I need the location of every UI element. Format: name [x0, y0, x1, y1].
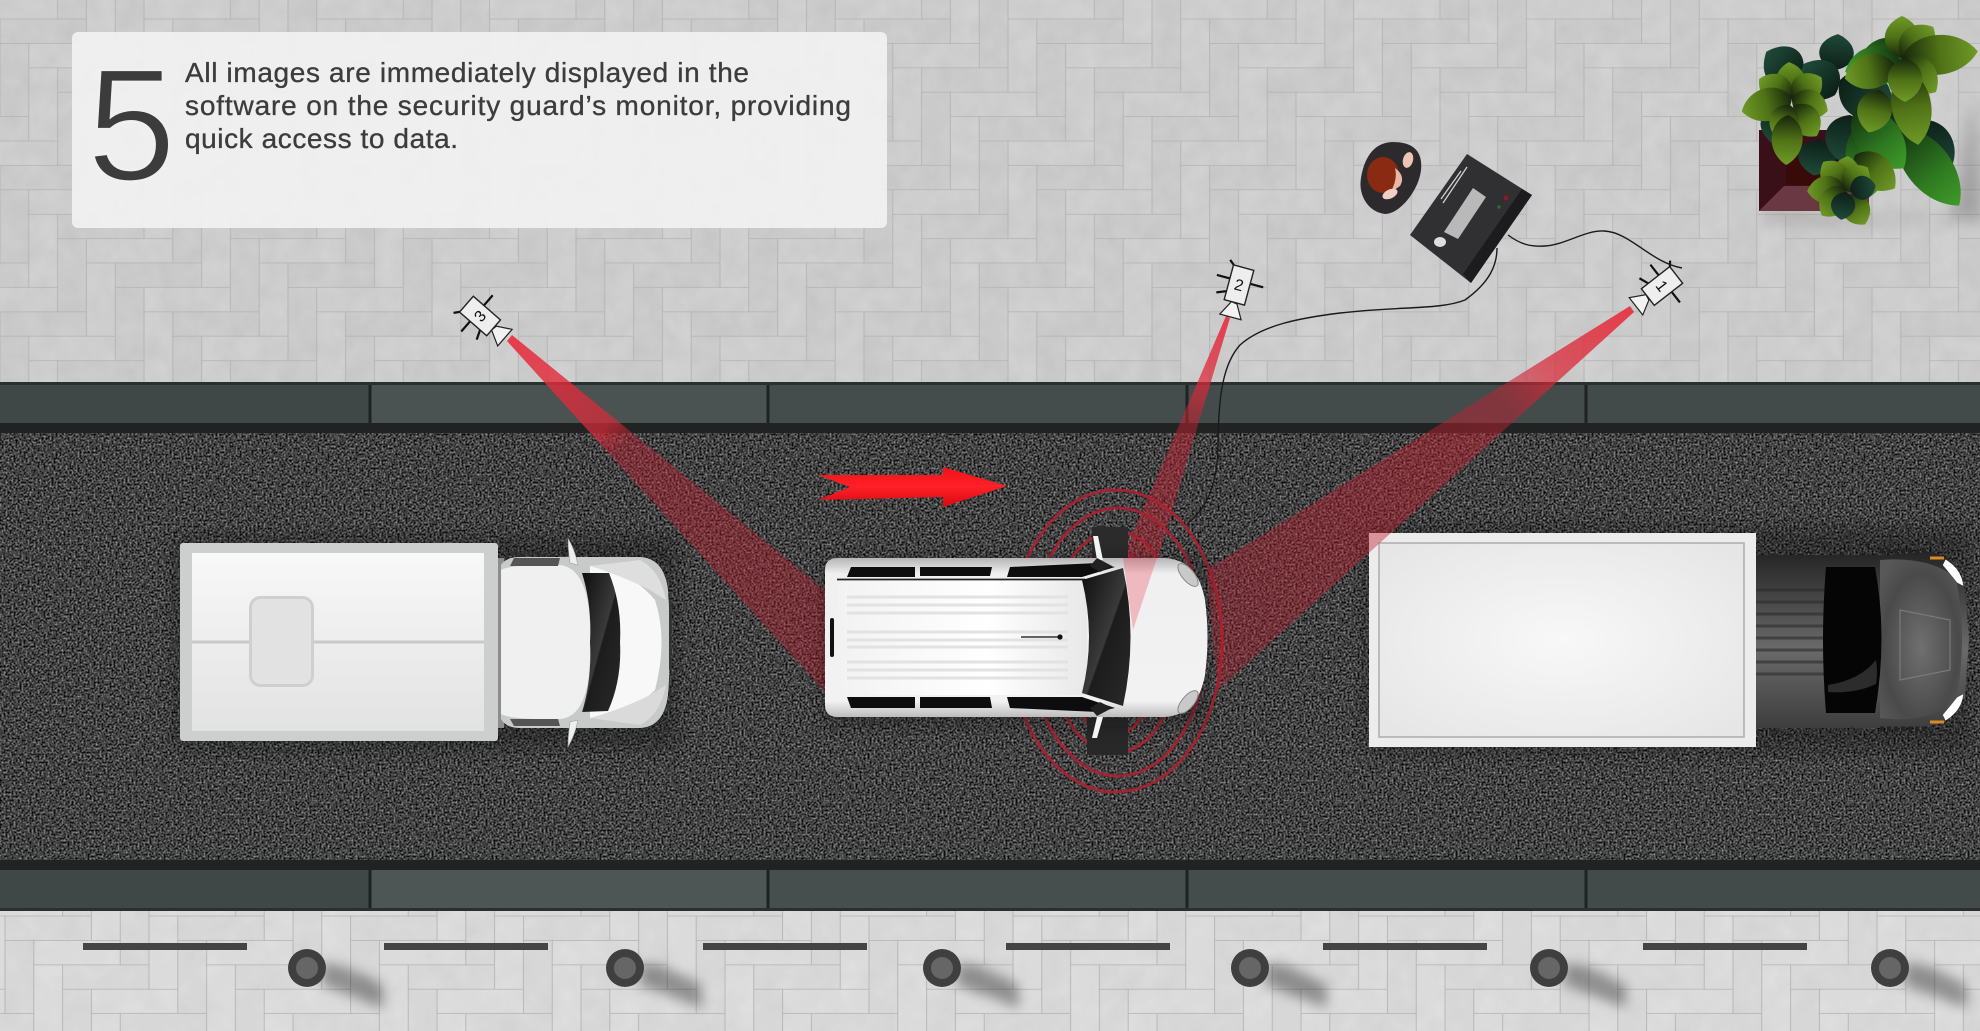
security guard seen from above	[1360, 142, 1421, 214]
laser beam from camera 2	[1122, 316, 1230, 558]
camera 2: 2	[1232, 277, 1245, 295]
laser beam from camera 1	[1206, 306, 1634, 690]
beam light falling on van windshield	[1123, 558, 1157, 630]
camera 1	[1621, 254, 1694, 325]
road asphalt	[0, 430, 1980, 862]
white delivery truck	[176, 538, 676, 748]
camera 3	[448, 283, 521, 356]
sensor blocks beside the van	[1087, 527, 1128, 755]
control console	[1410, 154, 1532, 283]
white van	[825, 536, 1208, 738]
step number: 5	[87, 35, 176, 214]
camera 1: 1	[1652, 278, 1671, 295]
bollard shadows	[322, 962, 1967, 1008]
description text	[185, 57, 851, 154]
direction arrow	[818, 467, 1007, 507]
camera 3: 3	[471, 308, 490, 326]
bottom curb	[0, 860, 1980, 911]
camera 2	[1207, 258, 1268, 323]
dark box truck	[1366, 527, 1971, 752]
sidewalk dash markers	[83, 943, 1807, 950]
description text: All images are immediately displayed in the	[185, 57, 749, 88]
red radar rings around sensor	[1010, 490, 1222, 792]
potted plant	[1738, 15, 1980, 231]
top curb	[0, 382, 1980, 433]
description text: quick access to data.	[185, 123, 458, 154]
cables from console to cameras	[1187, 231, 1682, 524]
info panel	[72, 32, 887, 228]
laser beam from camera 3	[507, 335, 825, 692]
bollards	[288, 949, 1909, 987]
description text: software on the security guard’s monitor, providing	[185, 90, 851, 121]
